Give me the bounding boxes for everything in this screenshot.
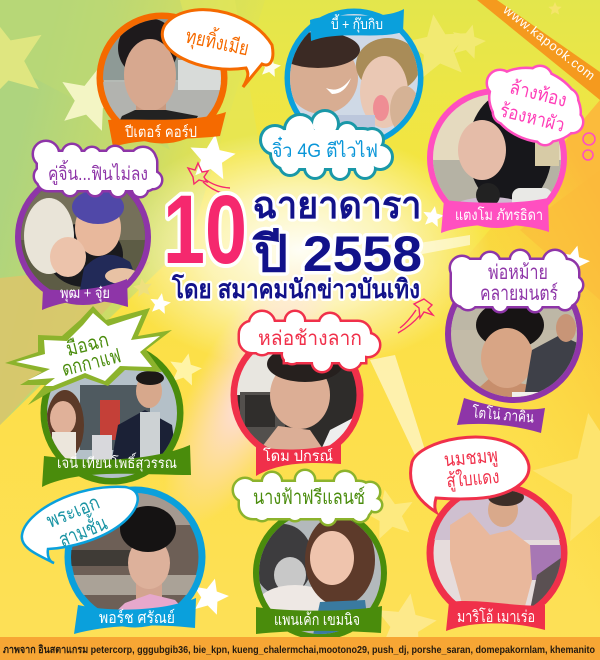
bubble [411, 437, 529, 512]
thought dots [583, 133, 595, 160]
name banner [108, 112, 226, 147]
cloud text: คลายมนตร์ [480, 282, 558, 305]
bubble text: พระเอก [44, 492, 103, 533]
credit strip [0, 637, 600, 660]
cloud text: คู่จิ้น...ฟินไม่ลง [48, 160, 148, 185]
title [163, 163, 433, 333]
portrait: Dome [234, 312, 379, 476]
photo [290, 14, 418, 134]
photo [237, 354, 352, 450]
name: บี้ + กุ๊บกิบ [331, 14, 383, 33]
portrait: Toni [448, 251, 582, 433]
heading line 3: โดย สมาคมนักข่าวบันเทิง [171, 273, 420, 304]
name: แตงโม ภัทรธิดา [455, 206, 543, 224]
bubble text [443, 446, 500, 492]
cloud text: จิ๋ว 4G ตีไวไฟ [272, 136, 378, 162]
burst text [60, 329, 123, 381]
cloud text [480, 262, 558, 305]
name banner [256, 606, 382, 634]
name banner [256, 442, 341, 476]
bubble [162, 10, 273, 87]
name banner [446, 601, 545, 631]
photo [434, 491, 561, 606]
cloud [480, 56, 590, 154]
portrait: Putm + Jui [18, 142, 161, 310]
bubble text: สู้ใบแดง [446, 466, 500, 492]
name: พุฒ + จุ๋ย [60, 285, 110, 303]
cloud [451, 251, 582, 311]
photo [71, 493, 196, 610]
cloud text: หล่อช้างลาก [258, 328, 362, 350]
cloud [240, 312, 379, 371]
photo [259, 520, 375, 634]
name: โดม ปกรณ์ [263, 447, 333, 465]
portrait: Tangmo [430, 56, 595, 233]
portrait: Porsche [22, 487, 202, 634]
name: โตโน่ ภาคิน [471, 403, 535, 427]
cloud [262, 112, 391, 178]
ribbon: kapook url [477, 0, 600, 100]
portrait: Bie + Kubkib [262, 9, 430, 178]
photo [433, 100, 561, 203]
cloud [34, 142, 161, 196]
bubble text: นมชมพู [443, 446, 499, 471]
name: ปีเตอร์ คอร์ป [124, 124, 197, 141]
portrait: Peter Corp [100, 10, 273, 147]
burst text: ดกกาแฟ [60, 345, 123, 381]
number 10: 10 [163, 175, 247, 284]
bubble text: ทุยทิ้งเมีย [183, 22, 252, 61]
bubble [22, 487, 138, 563]
cloud text: พ่อหม้าย [488, 262, 548, 284]
cloud text: ล้างท้อง [507, 77, 569, 112]
cloud text [498, 77, 569, 137]
name banner [42, 279, 128, 310]
photo [451, 306, 577, 397]
name: มาริโอ้ เมาเร่อ [457, 607, 535, 626]
burst text: มือฉก [64, 329, 111, 361]
name: เจนี่ เทียนโพธิ์สุวรรณ [57, 452, 177, 472]
name banner [42, 445, 191, 487]
bubble text [44, 492, 111, 552]
photo [47, 368, 177, 478]
heading line 1: ฉายาดารา [252, 185, 422, 227]
name banner [310, 9, 404, 41]
name banner [457, 398, 545, 433]
heading line 2: ปี 2558 [252, 226, 422, 282]
name: แพนเค้ก เขมนิจ [274, 611, 360, 629]
shooting star left [188, 163, 230, 193]
portrait: Mario [411, 437, 570, 631]
portrait: Janie [5, 306, 191, 487]
photo [21, 191, 145, 290]
portrait: Pankake [234, 471, 384, 640]
name banner [74, 598, 196, 634]
cloud text: ร้องหาผัว [498, 100, 567, 137]
cloud text: นางฟ้าฟรีแลนซ์ [253, 486, 365, 509]
name: พอร์ช ศรัณย์ [99, 608, 175, 627]
shooting star right [398, 299, 433, 333]
bubble text: สามชั้น [54, 509, 111, 552]
burst [5, 306, 172, 405]
photo [103, 19, 221, 120]
cloud [234, 471, 381, 524]
url text: www.kapook.com [500, 2, 598, 83]
name banner [441, 198, 549, 233]
